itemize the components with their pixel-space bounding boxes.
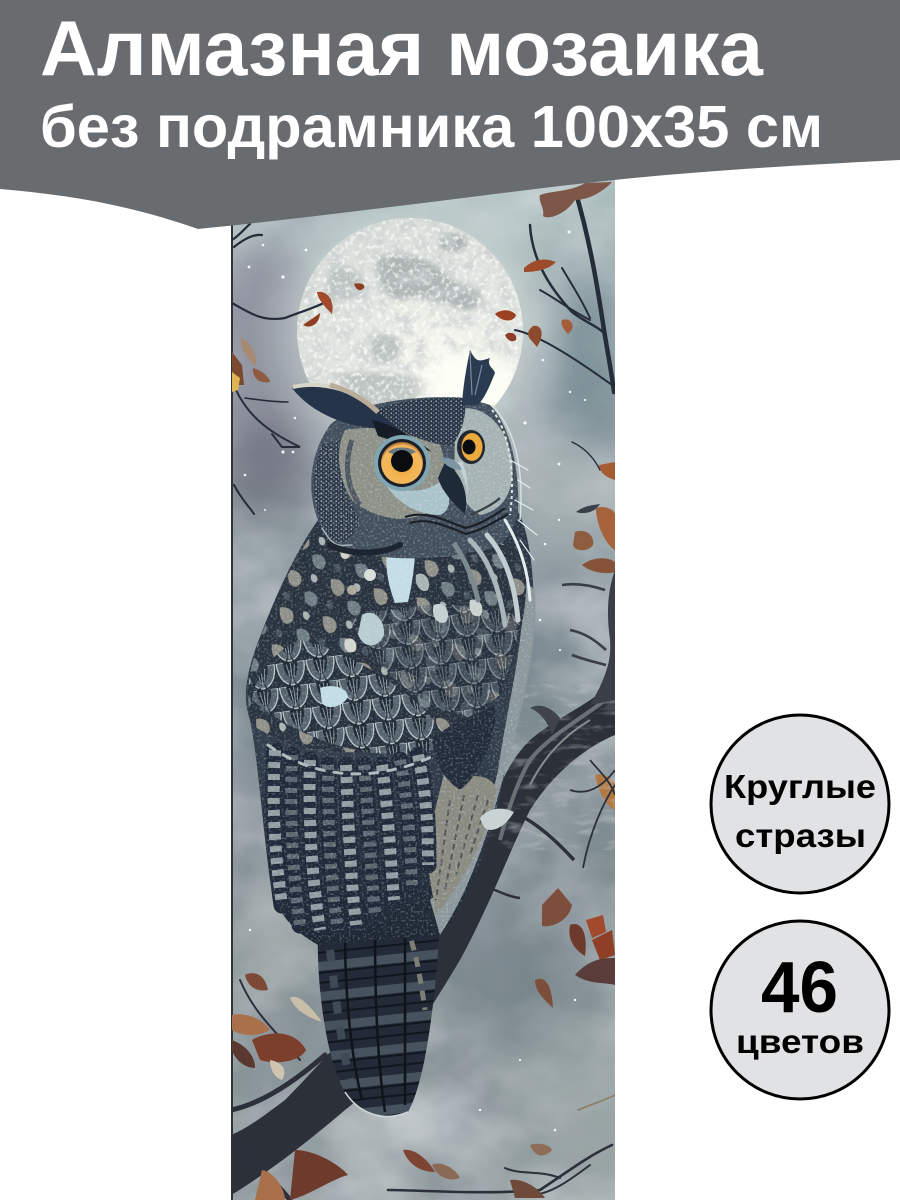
autumn leaves, right	[573, 462, 615, 810]
badge text line 2: стразы	[735, 817, 866, 854]
long wing feathers	[268, 745, 445, 930]
autumn leaves, lower	[232, 888, 615, 1200]
owl body	[245, 500, 540, 945]
colours label: цветов	[736, 1023, 864, 1060]
crown	[373, 397, 465, 446]
beak	[438, 458, 468, 514]
neck fluff	[322, 460, 537, 625]
mouth ruff lines	[405, 498, 508, 534]
upper twigs	[232, 190, 614, 514]
brow shadow	[372, 420, 432, 452]
painting: owl in the moonlight	[231, 180, 615, 1200]
right facial disc	[452, 408, 513, 515]
snow specks	[244, 230, 586, 1131]
right eye	[457, 430, 485, 464]
head feather texture	[305, 396, 520, 561]
header banner	[0, 0, 900, 229]
badge text line 1: Круглые	[724, 768, 876, 805]
subtitle: без подрамника 100х35 см	[40, 94, 823, 160]
talon	[480, 809, 514, 830]
right ear tuft	[462, 350, 495, 405]
autumn leaves, top	[232, 182, 612, 392]
left ear tuft	[292, 385, 398, 429]
left facial disc	[339, 428, 445, 519]
scapular mottled feathers	[248, 525, 526, 752]
dark wing shadow	[432, 705, 495, 790]
badge: round rhinestones	[711, 715, 889, 893]
title: Алмазная мозаика	[40, 4, 764, 92]
lower branches	[231, 980, 615, 1200]
pale flank feathers	[425, 580, 535, 935]
feather texture	[245, 500, 540, 945]
number of colours: 46	[761, 948, 838, 1028]
left eye	[374, 435, 430, 491]
large branch	[231, 570, 615, 1195]
owl head	[292, 350, 521, 561]
tail feathers	[318, 925, 440, 1116]
banner shape	[0, 0, 900, 229]
speckled left cheek	[314, 440, 360, 542]
dark left edge	[231, 170, 233, 1200]
badge: 46 colours	[711, 921, 889, 1099]
wing scale feathers	[252, 640, 450, 754]
night sky with clouds	[233, 180, 615, 1200]
pale blue chest flecks	[320, 540, 482, 707]
full moon	[297, 218, 523, 408]
blue cheek under eye	[387, 482, 450, 515]
